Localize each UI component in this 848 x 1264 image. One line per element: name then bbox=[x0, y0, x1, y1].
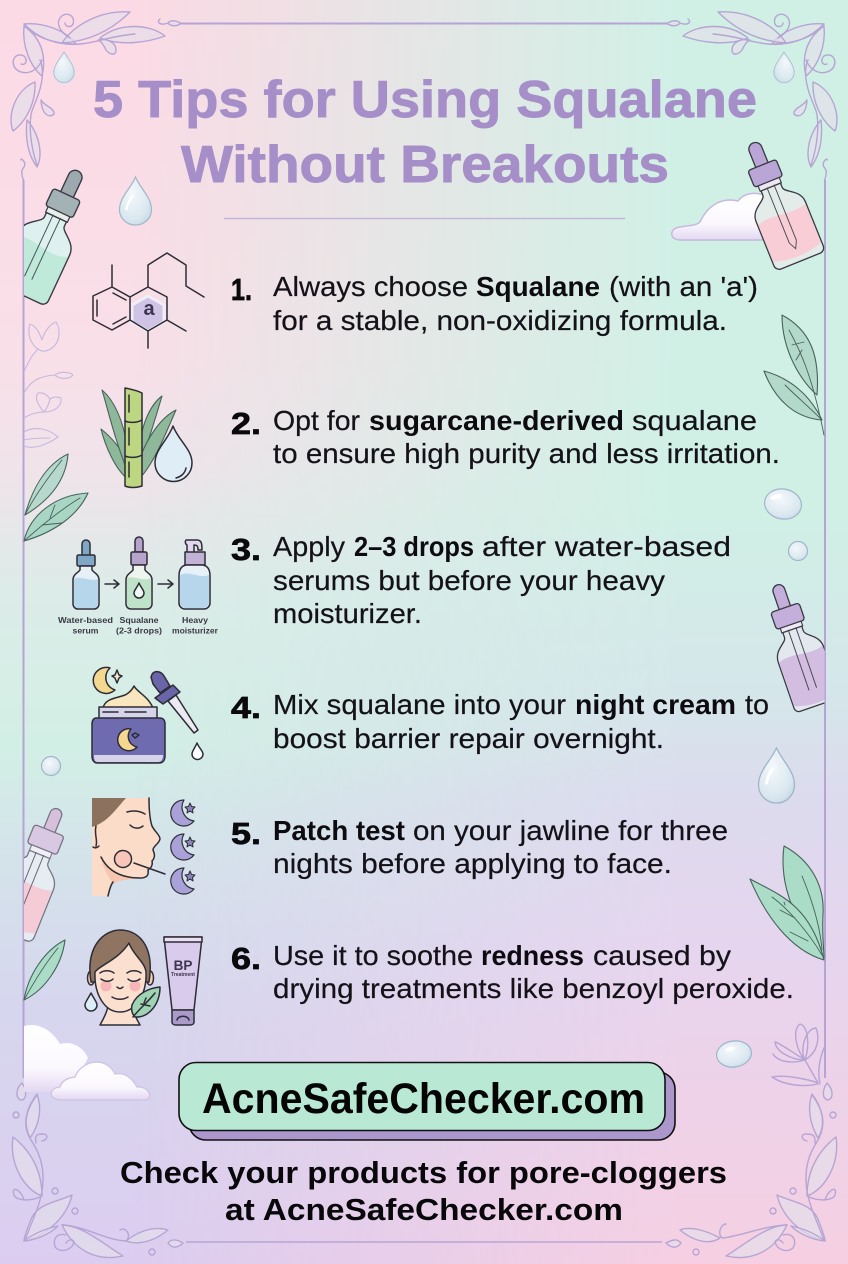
bubble bottom right bbox=[715, 1039, 753, 1069]
call to action button bbox=[179, 1062, 675, 1140]
tip 6 text: Use it to soothe bbox=[273, 940, 473, 971]
tip 5 text: on your jawline for three bbox=[413, 815, 728, 846]
tip 5 text bbox=[231, 815, 728, 879]
corner ornament: bottom right bbox=[666, 1024, 837, 1258]
tip 2 text: sugarcane-derived bbox=[369, 405, 624, 436]
bottle: heavy moisturizer bbox=[179, 540, 210, 609]
tip 1 icon: molecule: a bbox=[143, 298, 155, 320]
arrow: serum to squalane bbox=[105, 580, 119, 588]
clouds bottom left bbox=[24, 1025, 150, 1100]
tip 5 text: Patch test bbox=[273, 815, 405, 846]
tip 6 text bbox=[231, 940, 794, 1004]
tip 3 text: 2–3 drops bbox=[354, 531, 474, 562]
leaf left lower bbox=[24, 940, 65, 1000]
step labels: serum bbox=[72, 626, 99, 636]
bottle: water-based serum bbox=[73, 540, 99, 609]
flower near bottom right bbox=[772, 1024, 824, 1086]
cloud top right bbox=[672, 193, 790, 240]
step labels: Water-based bbox=[58, 615, 113, 625]
tip 1 text: for a stable, non-oxidizing formula. bbox=[273, 305, 727, 336]
title divider bbox=[224, 218, 625, 220]
tip 2 text bbox=[231, 405, 780, 469]
flowers left side bbox=[24, 322, 73, 447]
tip 4 text: night cream bbox=[575, 689, 736, 720]
tip 5 icon: jawline patch test bbox=[92, 798, 195, 896]
bubble left bbox=[42, 756, 60, 776]
crescent moon bbox=[93, 667, 115, 693]
step labels bbox=[58, 615, 219, 636]
BP tube: Treatment bbox=[171, 972, 195, 978]
tip 1 text: (with an 'a') bbox=[609, 271, 758, 302]
tip 4 text: 4. bbox=[231, 690, 261, 725]
tip 6 text: 6. bbox=[231, 941, 261, 976]
tip 2 text: to ensure high purity and less irritation. bbox=[273, 438, 780, 469]
tip 1 text bbox=[231, 271, 758, 336]
icon: water drop right bbox=[758, 748, 794, 803]
tip 4 icon: night cream jar and dropper bbox=[92, 667, 203, 763]
tip 6 text: caused by bbox=[593, 940, 731, 971]
tip 1 icon: molecule bbox=[93, 253, 204, 348]
step labels: (2-3 drops) bbox=[116, 626, 162, 636]
tip 4 text: to bbox=[745, 689, 769, 720]
tip 3 icon: layering steps bbox=[58, 537, 219, 636]
icon: water drop under corner bbox=[120, 177, 152, 225]
tip 3 text: 3. bbox=[231, 532, 261, 567]
step labels: Squalane bbox=[120, 615, 159, 625]
icon: small water drop right bbox=[774, 52, 794, 83]
bottle: pink dropper and cloud top right bbox=[672, 133, 825, 271]
step labels: moisturizer bbox=[172, 626, 219, 636]
tip 3 text: moisturizer. bbox=[273, 598, 422, 629]
leaves right upper bbox=[764, 315, 824, 435]
corner ornament: top left bbox=[11, 12, 181, 180]
step labels: Heavy bbox=[182, 615, 208, 625]
BP tube bbox=[164, 937, 202, 1025]
footer message: at AcneSafeChecker.com bbox=[225, 1192, 623, 1227]
tip 5 text: 5. bbox=[231, 816, 261, 851]
tip 4 text: Mix squalane into your bbox=[273, 689, 566, 720]
tip 3 text: after water-based bbox=[482, 531, 731, 562]
tip 2 text: Opt for bbox=[273, 405, 360, 436]
bottle: mint dropper left bbox=[24, 170, 83, 305]
bottle: lavender dropper right bbox=[770, 584, 824, 712]
corner ornament: bottom left bbox=[12, 1083, 183, 1258]
sparkle bbox=[112, 670, 122, 683]
corner ornament: top right bbox=[667, 12, 837, 180]
dropper bbox=[151, 672, 170, 693]
tip 4 text bbox=[231, 689, 769, 754]
BP tube: BP bbox=[174, 958, 192, 973]
tip 1 text: Always choose bbox=[273, 271, 468, 302]
bubbles right bbox=[762, 486, 808, 560]
tip 2 text: squalane bbox=[632, 405, 757, 436]
tip 5 text: nights before applying to face. bbox=[273, 848, 672, 879]
bottle: squalane bbox=[126, 537, 152, 609]
icon: small water drop bbox=[54, 52, 74, 83]
tip 2 text: 2. bbox=[231, 406, 261, 441]
tip 2 icon: sugarcane and drop bbox=[101, 388, 192, 488]
tip 3 text: Apply bbox=[273, 531, 345, 562]
leaves right lower bbox=[750, 846, 824, 960]
tip 3 text: serums but before your heavy bbox=[273, 565, 665, 596]
arrow: squalane to moisturizer bbox=[158, 580, 173, 588]
tip 1 text: Squalane bbox=[476, 271, 600, 302]
call to action button: AcneSafeChecker.com bbox=[202, 1075, 645, 1123]
footer message: Check your products for pore-cloggers bbox=[120, 1155, 727, 1190]
tip 4 text: boost barrier repair overnight. bbox=[273, 723, 664, 754]
bottle: pink dropper left lower bbox=[24, 808, 64, 942]
footer message bbox=[120, 1155, 727, 1227]
moons with stars bbox=[171, 800, 194, 894]
tip 3 text bbox=[231, 531, 731, 629]
title bbox=[93, 71, 757, 194]
title: 5 Tips for Using Squalane bbox=[93, 71, 757, 129]
leaves left mid bbox=[24, 454, 88, 541]
title: Without Breakouts bbox=[181, 136, 669, 194]
tip 6 icon: soothed face and BP tube bbox=[85, 930, 202, 1025]
tip 1 text: 1. bbox=[231, 272, 252, 307]
tip 6 text: redness bbox=[481, 940, 584, 971]
tip 6 text: drying treatments like benzoyl peroxide. bbox=[273, 973, 794, 1004]
